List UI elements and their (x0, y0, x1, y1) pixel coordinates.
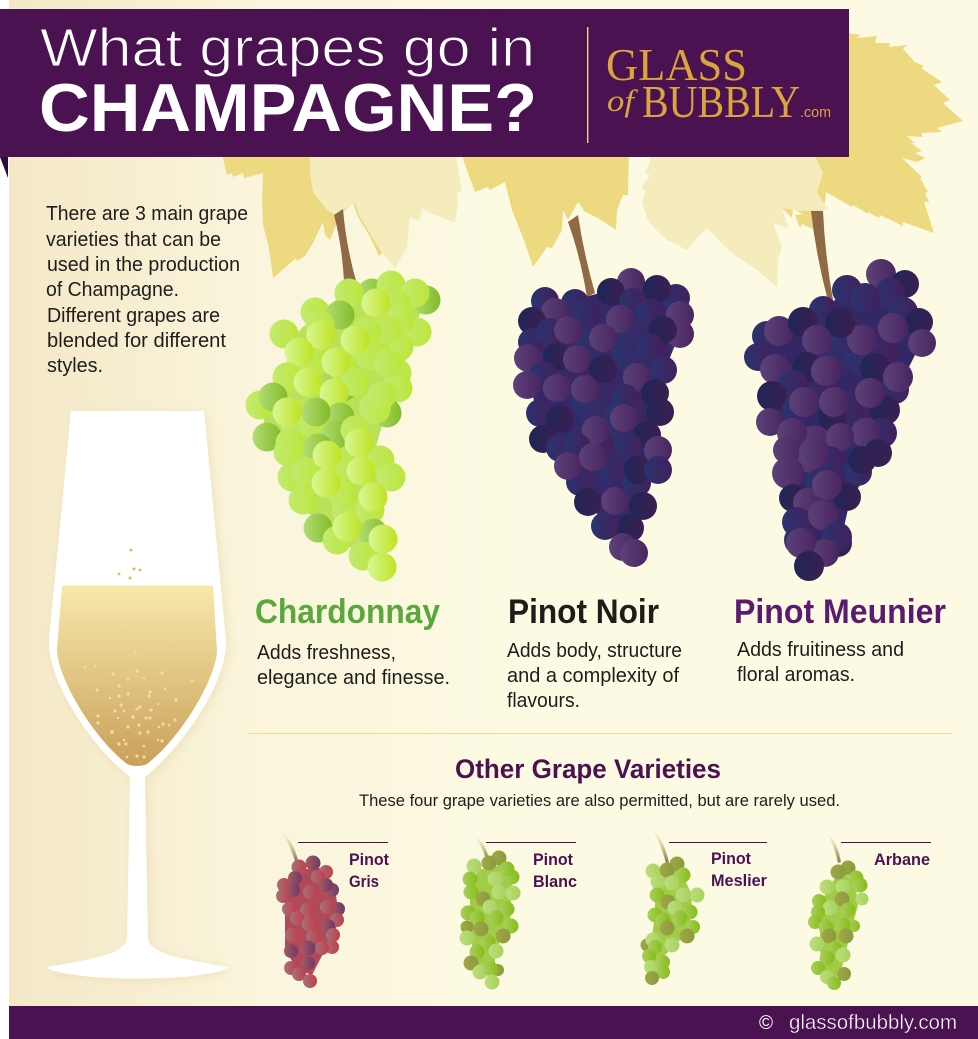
logo: Glass of Bubbly: BUBBLY (642, 76, 800, 127)
label: Meslier (711, 871, 767, 890)
footer bar (9, 1006, 978, 1039)
Pinot Meunier section (734, 593, 946, 686)
label (711, 849, 767, 890)
description: Adds body, structure (507, 640, 682, 662)
logo: Glass of Bubbly: GLASS (606, 39, 747, 90)
header divider (587, 27, 588, 143)
Pinot Noir section (507, 593, 682, 712)
logo: Glass of Bubbly: of (607, 83, 639, 118)
stem (827, 833, 841, 863)
intro text: blended for different (47, 330, 226, 352)
stem (282, 833, 298, 861)
description (507, 640, 682, 712)
grapes (808, 860, 868, 990)
label: Blanc (533, 872, 577, 891)
intro text: used in the production (47, 254, 240, 276)
variety: Pinot Blanc (460, 836, 577, 990)
grape stems (334, 209, 833, 300)
label: Gris (349, 872, 379, 891)
label line (669, 842, 767, 843)
grapes: Chardonnay (246, 270, 440, 582)
grapes (276, 856, 345, 988)
description: Adds freshness, (257, 642, 396, 664)
grapes (640, 856, 704, 985)
label: Pinot (533, 850, 573, 869)
label (349, 850, 389, 891)
intro text: styles. (47, 355, 103, 377)
heading: Pinot Noir: Pinot Noir (508, 593, 659, 631)
intro text: of Champagne. (46, 279, 179, 301)
bubbles (83, 606, 194, 759)
label: Arbane (874, 850, 930, 869)
description: floral aromas. (737, 664, 855, 686)
heading: Pinot Meunier: Pinot Meunier (734, 593, 946, 631)
intro text (46, 203, 248, 377)
label: Pinot (711, 849, 751, 868)
logo: Glass of Bubbly (606, 39, 831, 127)
label line (486, 842, 576, 843)
glass body (47, 411, 228, 979)
heading: Chardonnay: Chardonnay (255, 593, 440, 631)
label line (298, 842, 388, 843)
copyright credit: © (759, 1013, 773, 1034)
description (737, 639, 904, 686)
logo: Glass of Bubbly: .com (800, 104, 831, 121)
heading: Other Grape Varieties: Other Grape Varieties (455, 754, 721, 784)
description: elegance and finesse. (257, 667, 450, 689)
header banner (0, 9, 849, 178)
description: Adds fruitiness and (737, 639, 904, 661)
description: and a complexity of (507, 665, 679, 687)
grapes: Pinot Meunier (744, 259, 936, 581)
champagne glass (47, 411, 230, 981)
intro text: varieties that can be (46, 229, 221, 251)
intro text: There are 3 main grape (46, 203, 248, 225)
glass shadow (49, 413, 230, 981)
Chardonnay section (255, 593, 450, 689)
vine leaves (221, 30, 963, 287)
champagne liquid (57, 586, 217, 766)
variety: Pinot Gris (276, 833, 389, 988)
description (257, 642, 450, 689)
title: CHAMPAGNE? (39, 70, 537, 146)
grapes: Pinot Noir (513, 268, 694, 567)
title (39, 18, 537, 146)
description: flavours. (507, 690, 580, 712)
intro text: Different grapes are (47, 305, 220, 327)
copyright credit: glassofbubbly.com (789, 1012, 957, 1034)
label: Pinot (349, 850, 389, 869)
label line (841, 842, 931, 843)
title: What grapes go in (40, 18, 535, 78)
grapes (460, 850, 520, 990)
subheading: These four grape varieties are also permitted, but are rarely used. (359, 791, 840, 810)
variety: Arbane (808, 833, 931, 990)
variety: Pinot Meslier (640, 830, 767, 985)
banner background (0, 9, 849, 157)
banner fold (0, 157, 8, 178)
stem (653, 830, 669, 863)
stem (474, 836, 489, 860)
label (533, 850, 577, 891)
